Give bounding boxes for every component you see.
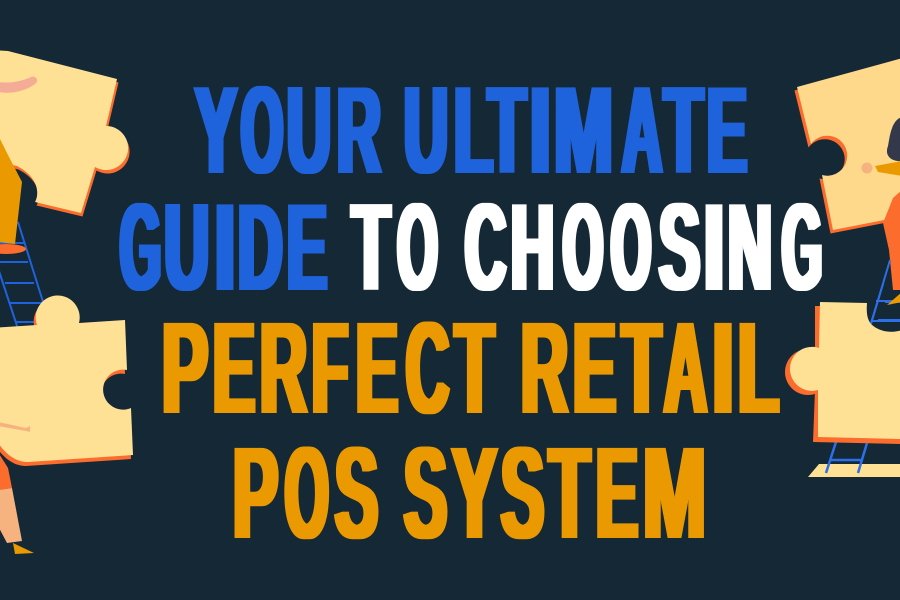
text: G (782, 179, 822, 317)
title line 1: L (454, 62, 493, 200)
title line 4: S (335, 419, 378, 566)
title line 1: U (404, 62, 448, 200)
title line 3: P (162, 294, 208, 441)
title line 4: S (404, 419, 447, 566)
title line 1: M (554, 62, 613, 200)
puzzle piece: top right (794, 56, 900, 234)
illustration: dart accent (887, 292, 900, 305)
title line 1: I (530, 62, 551, 200)
title line 3: T (622, 294, 661, 441)
title line 2: to choosing: T (352, 179, 390, 317)
title: E (707, 62, 747, 200)
title line 4: O (285, 419, 328, 566)
title line 4: E (596, 419, 638, 566)
title line 4: M (643, 419, 706, 566)
title line 2: guide: G (120, 179, 161, 317)
title line 3: E (573, 294, 616, 441)
title line 2: to choosing: H (511, 179, 554, 317)
title line 3: E (356, 294, 398, 441)
title line 2: to choosing: O (398, 179, 438, 317)
title line 3: L (738, 294, 779, 441)
illustration: left ladder (0, 222, 44, 332)
title line 3: I (712, 294, 734, 441)
title line 3: T (455, 294, 494, 441)
title: E (287, 179, 327, 317)
title (120, 62, 822, 566)
title line 3: E (213, 294, 255, 441)
title line 1: T (664, 62, 703, 200)
illustration: right ladder (871, 260, 900, 324)
puzzle piece: top left (0, 50, 130, 216)
title line 4: S (501, 419, 544, 566)
figure: person on top-right piece (862, 117, 900, 290)
title line 2: to choosing: I (704, 179, 724, 317)
puzzle piece: bottom left (0, 296, 133, 466)
figure: person holding bottom-left piece (0, 422, 34, 554)
title line 4: Y (452, 419, 497, 566)
title line 4: P (233, 419, 278, 566)
title line 3: R (260, 294, 307, 441)
title line 3: R (521, 294, 568, 441)
title line 1: A (622, 62, 662, 200)
title line 3: C (406, 294, 449, 441)
title line 1: U (287, 62, 331, 200)
title line 1: O (241, 62, 283, 200)
title line 1: Y (195, 62, 237, 200)
title line 2: to choosing: C (465, 179, 506, 317)
title line 3: A (664, 294, 707, 441)
title line 2: to choosing: S (659, 179, 700, 317)
title line 1: T (488, 62, 526, 200)
illustration: floor (808, 464, 900, 477)
title line 1: R (337, 62, 381, 200)
illustration: lower ladder (826, 442, 867, 473)
puzzle piece: bottom right (785, 284, 900, 444)
title line 2: to choosing: O (611, 179, 651, 317)
title line 3: F (312, 294, 348, 441)
title line 2: to choosing: N (728, 179, 772, 317)
title line 2: guide: U (164, 179, 209, 317)
title line 2: guide: I (214, 179, 236, 317)
title line 4: T (549, 419, 590, 566)
title line 2: guide: D (238, 179, 282, 317)
figure: person on top-left piece (0, 76, 37, 254)
title line 2: to choosing: O (563, 179, 603, 317)
